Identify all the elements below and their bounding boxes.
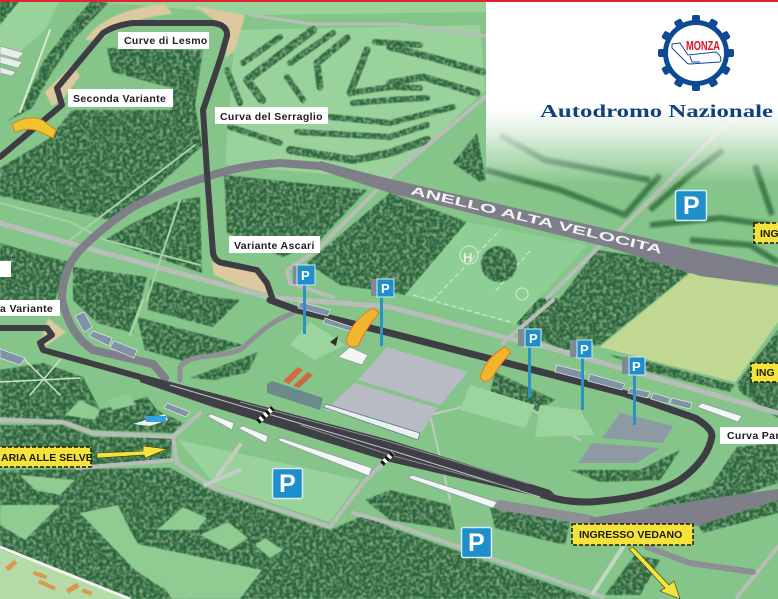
sign: ingresso vedano [572,524,693,545]
yellow bridge right [480,347,511,382]
logo: Monza gear [658,15,734,91]
tree rows [227,30,483,160]
label: curve di lesmo: Curve di Lesmo [124,35,208,47]
old banking ring road [62,163,753,572]
clearings in the woods [0,393,283,599]
top red line [0,0,778,2]
parking sign: P [683,192,700,220]
helipad field: H [463,250,472,265]
sand run-off areas [42,4,276,346]
label: curva del serraglio [215,107,328,124]
infield plazas and grey pads [290,322,673,463]
parking pole: P [529,331,538,346]
top-left buildings [0,46,24,76]
parking sign [676,190,706,220]
label: curve di lesmo [118,32,209,49]
parking pole: P [580,342,589,357]
anello alta velocita road surface [320,161,778,285]
parking sign [272,468,302,498]
label: variante ascari [229,236,320,253]
chequered flags [258,408,393,464]
parking pole: P [381,281,390,296]
pale tree rows behind the logo fade [486,135,778,262]
sign: santa maria alle selve: ARIA ALLE SELVE [1,452,93,464]
tan field [600,273,778,382]
parking pole [570,340,592,410]
parking pole: P [301,268,310,283]
label: curva parabolica [720,427,778,444]
label: variante ascari: Variante Ascari [234,240,315,252]
label: prima variante: a Variante [0,303,53,315]
white logo panel with fade [486,0,778,182]
parking sign [462,528,492,558]
label: seconda variante: Seconda Variante [73,93,166,105]
label: curva del serraglio: Curva del Serraglio [220,111,323,123]
yellow bridge centre [346,308,379,347]
helipad field [405,222,587,325]
start straight with pit lane [140,374,560,500]
lower ring section [590,489,778,533]
arrow: vedano exit [629,547,680,599]
sign: santa maria alle selve [0,447,93,467]
bottom-left town [0,547,130,599]
white pit buildings [133,336,742,508]
sign: ingresso right lower: ING [756,367,775,379]
sign: ingresso right lower [751,363,778,382]
label: prima variante [0,300,60,316]
grandstands along the banking [0,302,692,417]
sign: ingresso right upper [754,223,778,243]
parking pole: P [632,359,641,374]
parking pole [518,329,541,398]
parking sign: P [279,470,296,498]
parking pole [622,357,645,425]
blank white label [0,261,11,277]
road text: anello alta velocita: ANELLO ALTA VELOCITA [409,183,664,257]
arrow: towards parking [97,446,167,458]
yellow bridge upper left [12,118,56,138]
label: seconda variante [68,89,173,107]
sign: ingresso vedano: INGRESSO VEDANO [579,529,682,541]
parking pole [371,279,394,346]
parking pole [293,265,315,334]
parking sign: P [468,529,485,557]
logo wordmark: Autodromo Nazionale [540,101,773,121]
dark grand prix circuit [0,23,712,502]
light fields [0,0,486,522]
logo: Monza gear: MONZA [686,38,720,53]
